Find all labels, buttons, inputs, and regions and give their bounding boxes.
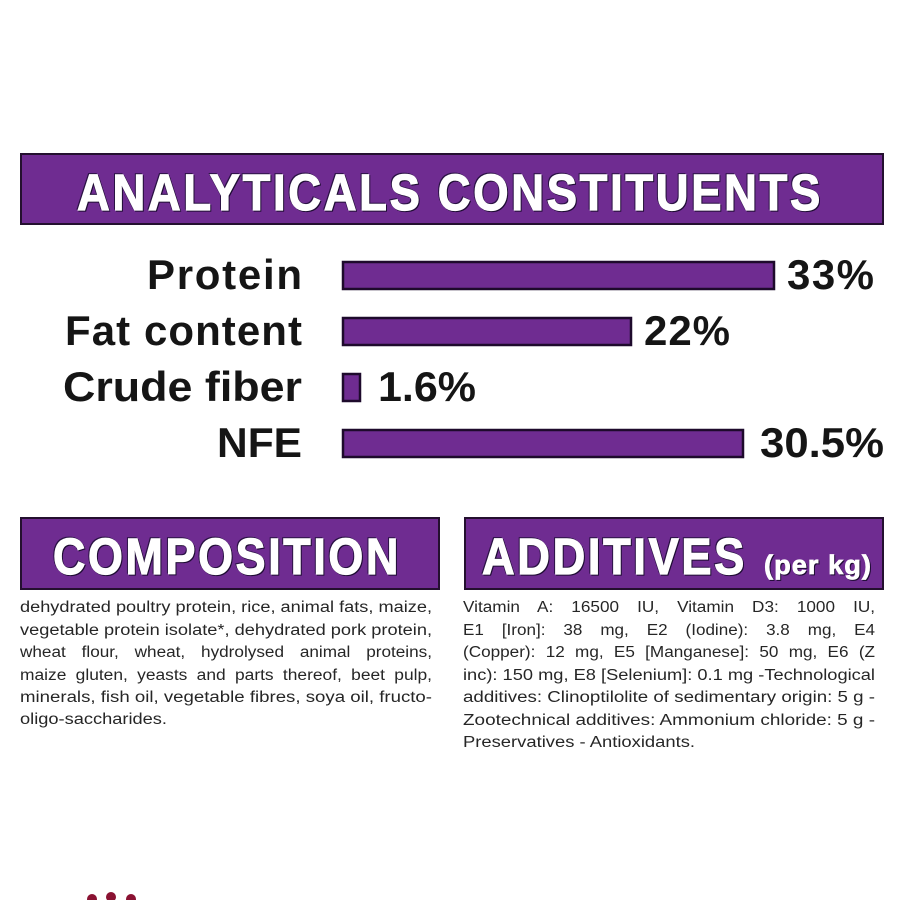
- text block: composition: dehydrated poultry protein, rice, animal fats, maize,: [20, 599, 432, 616]
- row: crude fiber: Crude fiber: [63, 363, 302, 410]
- text block: additives: additives: Clinoptilolite of sedimentary origin: 5 g -: [463, 689, 875, 706]
- text block: additives: Preservatives - Antioxidants.: [463, 734, 695, 751]
- panel: analyticals constituents header: [21, 154, 883, 224]
- text block: additives: (Copper): 12 mg, E5 [Manganese]: 50 mg, E6 (Z: [463, 644, 875, 661]
- text block: composition: vegetable protein isolate*, dehydrated pork protein,: [20, 622, 432, 639]
- panel: composition header: COMPOSITION: [53, 528, 401, 585]
- text block: additives: inc): 150 mg, E8 [Selenium]: 0.1 mg -Technological: [463, 667, 875, 684]
- row: fat content: Fat content: [65, 307, 302, 354]
- text block: additives: Vitamin A: 16500 IU, Vitamin D3: 1000 IU,: [463, 599, 875, 616]
- bar chart: analytical constituents: [63, 251, 884, 466]
- icon: cropped crown dots: [87, 892, 136, 900]
- text block: composition: maize gluten, yeasts and parts thereof, beet pulp,: [20, 667, 432, 684]
- heading: analyticals constituents: ANALYTICALS CONSTITUENTS: [77, 164, 823, 221]
- panel: additives header: ADDITIVES: [482, 528, 747, 585]
- row: crude fiber: 1.6%: [378, 363, 476, 410]
- text block: composition: wheat flour, wheat, hydrolysed animal proteins,: [19, 644, 432, 661]
- panel: additives header: (per kg): [764, 550, 872, 580]
- text block: composition: [19, 599, 432, 728]
- text block: additives: [463, 599, 875, 751]
- text block: additives: Zootechnical additives: Ammonium chloride: 5 g -: [463, 712, 875, 729]
- row: fat content: 22%: [644, 307, 730, 354]
- row: protein: Protein: [147, 251, 302, 298]
- row: fat content: [65, 307, 730, 354]
- text block: composition: minerals, fish oil, vegetable fibres, soya oil, fructo-: [20, 689, 432, 706]
- panel: additives header: [465, 518, 883, 589]
- text block: additives: E1 [Iron]: 38 mg, E2 (Iodine): 3.8 mg, E4: [463, 622, 875, 639]
- row: nfe: NFE: [217, 419, 302, 466]
- row: protein: 33%: [787, 251, 874, 298]
- text block: composition: oligo-saccharides.: [20, 711, 167, 728]
- row: crude fiber: [63, 363, 476, 410]
- row: nfe: 30.5%: [760, 419, 884, 466]
- row: nfe: [217, 419, 884, 466]
- row: protein: [147, 251, 874, 298]
